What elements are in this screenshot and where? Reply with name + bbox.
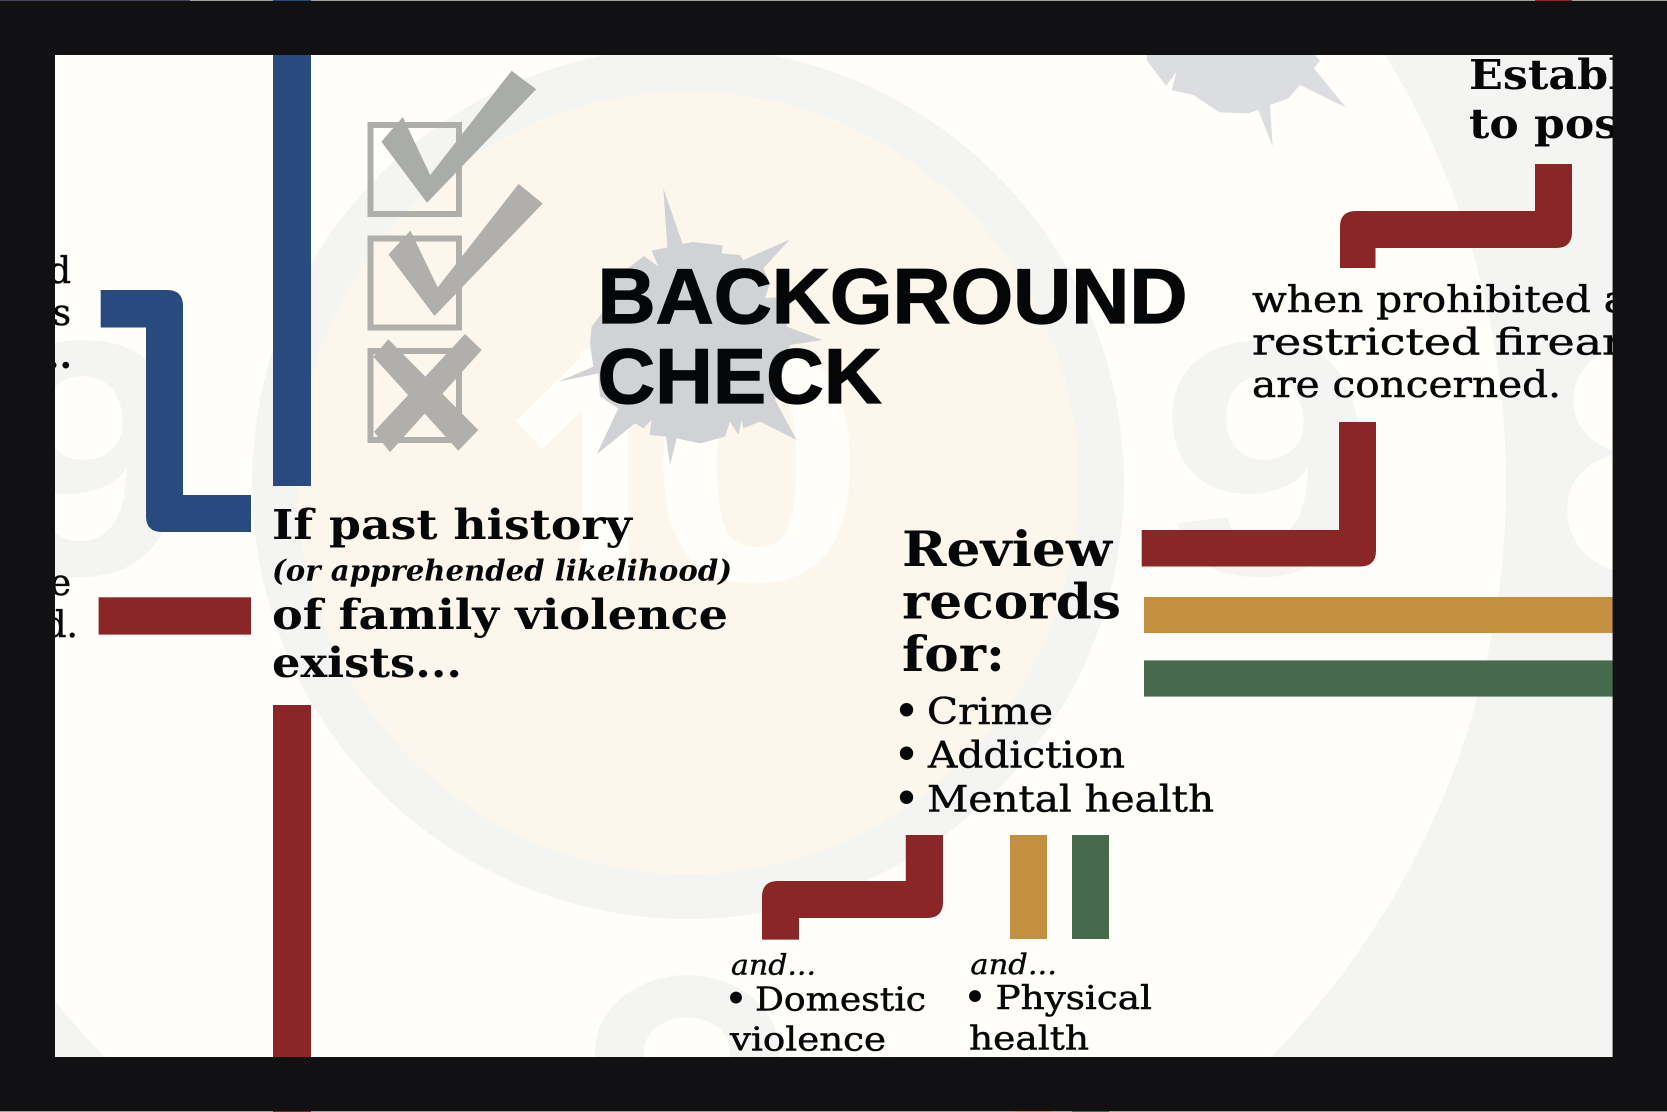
text: domestic violence: and... [731,949,816,982]
icon: checked box one [370,71,536,214]
text: review list: • [894,688,919,733]
text: prohibited firearms note: restricted firear [1252,322,1625,363]
arrow: red elbow top right [1340,164,1572,268]
title: BACKGROUND [598,252,1188,340]
text: domestic violence: • [725,979,747,1019]
text: review records heading [902,520,1121,683]
text: review records heading: for: [902,625,1005,683]
text: establish clipped heading [1469,51,1625,148]
text: family violence condition [272,501,732,687]
text: physical health: health [969,1018,1089,1058]
text: family violence condition: (or apprehended likelihood) [272,554,732,588]
icon: crossed box [370,334,482,452]
text: domestic violence [725,949,926,1059]
text: review list: • [894,732,919,776]
text: establish clipped heading: Establ [1469,51,1625,99]
text: physical health: Physical [996,978,1152,1017]
centre digits: 10: 1 [504,277,690,651]
text: clipped left fragments: ... [34,335,72,377]
text: clipped left fragments: e [50,563,71,604]
text: prohibited firearms note: are concerned. [1252,365,1561,406]
text: review list: • [894,776,919,821]
text: physical health [964,948,1152,1058]
text: family violence condition: of family violence [272,591,728,639]
icon: burst behind title [558,188,823,465]
arrow: red horizontal bar left [99,597,251,635]
text: establish clipped heading: to pos [1469,100,1619,148]
arrow: green bar [1144,660,1613,697]
text: review list [894,688,1214,821]
text: family violence condition: If past history [272,501,633,549]
text: review list: Addiction [927,736,1125,776]
title [598,252,1188,420]
text: family violence condition: exists... [272,639,462,687]
text: prohibited firearms note [1252,280,1628,406]
ring digit: 9 right: 9 [1159,271,1374,645]
ring shape: top of cropped bottom numeral [595,975,779,1057]
centre digits: 10: 0 [648,277,866,651]
text: domestic violence: violence [729,1020,886,1059]
arrow: red vertical bar [273,705,311,1057]
edge: top pixel strip [0,0,1667,1]
text: review records heading: Review [902,520,1114,578]
arrow: red elbow bottom [762,835,943,940]
edge: bottom pixel strip [0,1111,1667,1112]
text: clipped left fragments: s [53,293,71,334]
icon: burst top right [1147,55,1346,147]
text: clipped left fragments: d. [44,605,78,646]
text: clipped left fragments: d [48,251,71,292]
text: physical health: and... [970,948,1057,981]
text: review list: Crime [927,692,1053,733]
arrow: orange bar [1144,597,1613,633]
text: clipped left fragments [34,251,78,646]
centre digits: 10 [516,348,850,583]
text: review list: Mental health [927,780,1214,821]
text: domestic violence: Domestic [755,980,926,1018]
arrow: blue elbow [101,290,251,532]
arrow: blue vertical bar [273,55,311,486]
icon: checked box two [370,184,543,328]
arrow: orange vertical bar [1010,835,1047,939]
arrow: red elbow middle right [1142,422,1376,566]
text: physical health: • [964,978,986,1018]
arrow: green vertical bar [1072,835,1109,939]
title: CHECK [598,332,882,420]
text: review records heading: records [902,572,1121,630]
text: prohibited firearms note: when prohibited a [1252,280,1628,321]
